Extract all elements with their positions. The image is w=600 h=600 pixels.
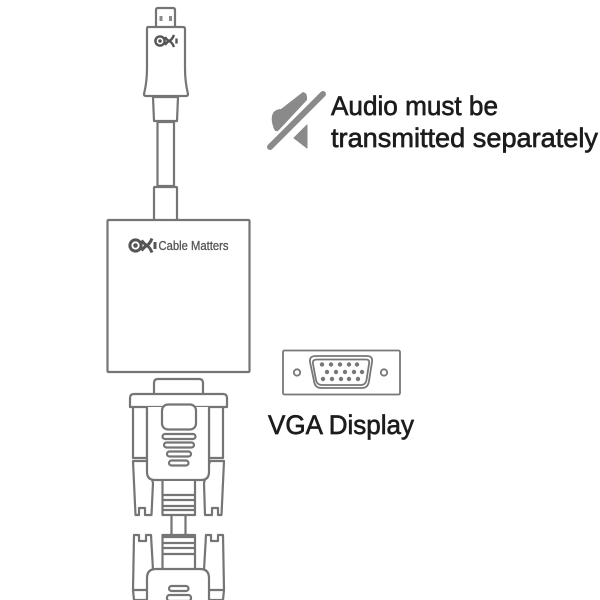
icon: plug logo bbox=[155, 35, 176, 47]
thumbscrew left bbox=[133, 535, 153, 600]
ridges bbox=[169, 586, 188, 591]
connector collar bbox=[153, 97, 178, 121]
lower thumbscrew right bbox=[204, 461, 224, 515]
upper thumbscrew right bbox=[209, 406, 223, 458]
VGA label: VGA Display bbox=[268, 410, 414, 440]
cable bbox=[158, 122, 174, 186]
icon: Cable Matters logo bbox=[130, 238, 155, 252]
connector plug body bbox=[144, 27, 188, 96]
lower neck bbox=[162, 535, 195, 570]
VGA port icon bbox=[283, 350, 400, 394]
brand name: Cable Matters bbox=[158, 239, 228, 253]
connector shell bbox=[154, 379, 203, 394]
VGA cable bbox=[172, 515, 186, 535]
micro connector tip bbox=[156, 8, 175, 27]
upper thumbscrew left bbox=[133, 406, 147, 458]
lower thumbscrew left bbox=[133, 461, 153, 515]
VGA connector upper bbox=[130, 379, 227, 515]
port plate bbox=[283, 350, 400, 394]
audio note: transmitted separately bbox=[331, 123, 599, 153]
connector body bbox=[147, 407, 209, 480]
icon: muted speaker bbox=[270, 92, 323, 148]
lower body bbox=[147, 569, 209, 600]
adapter box bbox=[108, 220, 250, 372]
port shell bbox=[310, 356, 372, 388]
screw holes bbox=[294, 369, 300, 376]
VGA connector lower bbox=[133, 535, 224, 600]
thumbscrew right bbox=[204, 535, 224, 600]
grip ridges bbox=[162, 434, 196, 466]
port pins bbox=[320, 362, 364, 381]
adapter illustration bbox=[108, 8, 250, 600]
neck bbox=[162, 481, 195, 515]
strain relief bbox=[154, 187, 177, 220]
flange bbox=[130, 394, 227, 407]
screen opening bbox=[162, 404, 196, 430]
audio note: Audio must be bbox=[331, 91, 498, 121]
